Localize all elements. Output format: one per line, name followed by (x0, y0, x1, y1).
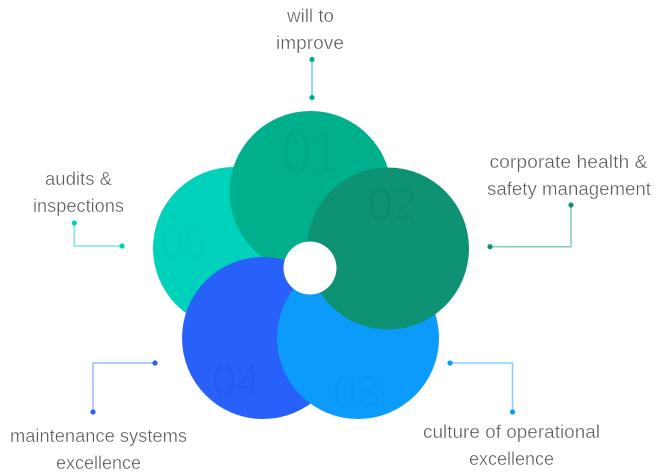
connector 04 (90, 360, 158, 415)
label: corporate health & safety management (487, 152, 651, 199)
petal 03: 03 (333, 366, 380, 417)
connector 02 (487, 202, 574, 249)
label: maintenance systems excellence: excellence (56, 453, 141, 473)
petal 02: 02 (368, 179, 417, 230)
petal 05 (153, 167, 315, 329)
label: corporate health & safety management: corporate health & (490, 152, 648, 172)
connector 03 (447, 360, 515, 415)
label: culture of operational excellence: culture of operational (423, 422, 600, 442)
label: will to improve: will to (286, 6, 334, 26)
label: audits & inspections: inspections (33, 196, 124, 216)
label: audits & inspections: audits & (45, 169, 112, 189)
petal 05: 05 (161, 217, 207, 268)
petal 01 (230, 111, 392, 273)
connector 01 (309, 57, 315, 100)
connector 05 (72, 220, 125, 249)
label: culture of operational excellence: excellence (469, 449, 554, 469)
label: will to improve (276, 6, 344, 53)
label: corporate health & safety management: safety management (487, 179, 651, 199)
petal 01: 01 (282, 118, 340, 187)
label: maintenance systems excellence: maintenance systems (10, 426, 187, 446)
petal 04: 04 (212, 355, 260, 406)
label: will to improve: improve (276, 33, 344, 53)
petal 02 (307, 168, 469, 330)
label: maintenance systems excellence (10, 426, 187, 473)
petal 04 (182, 257, 344, 419)
label: audits & inspections (33, 169, 124, 216)
label: culture of operational excellence (423, 422, 600, 469)
petal 03 (277, 257, 439, 419)
center circle (284, 242, 336, 294)
